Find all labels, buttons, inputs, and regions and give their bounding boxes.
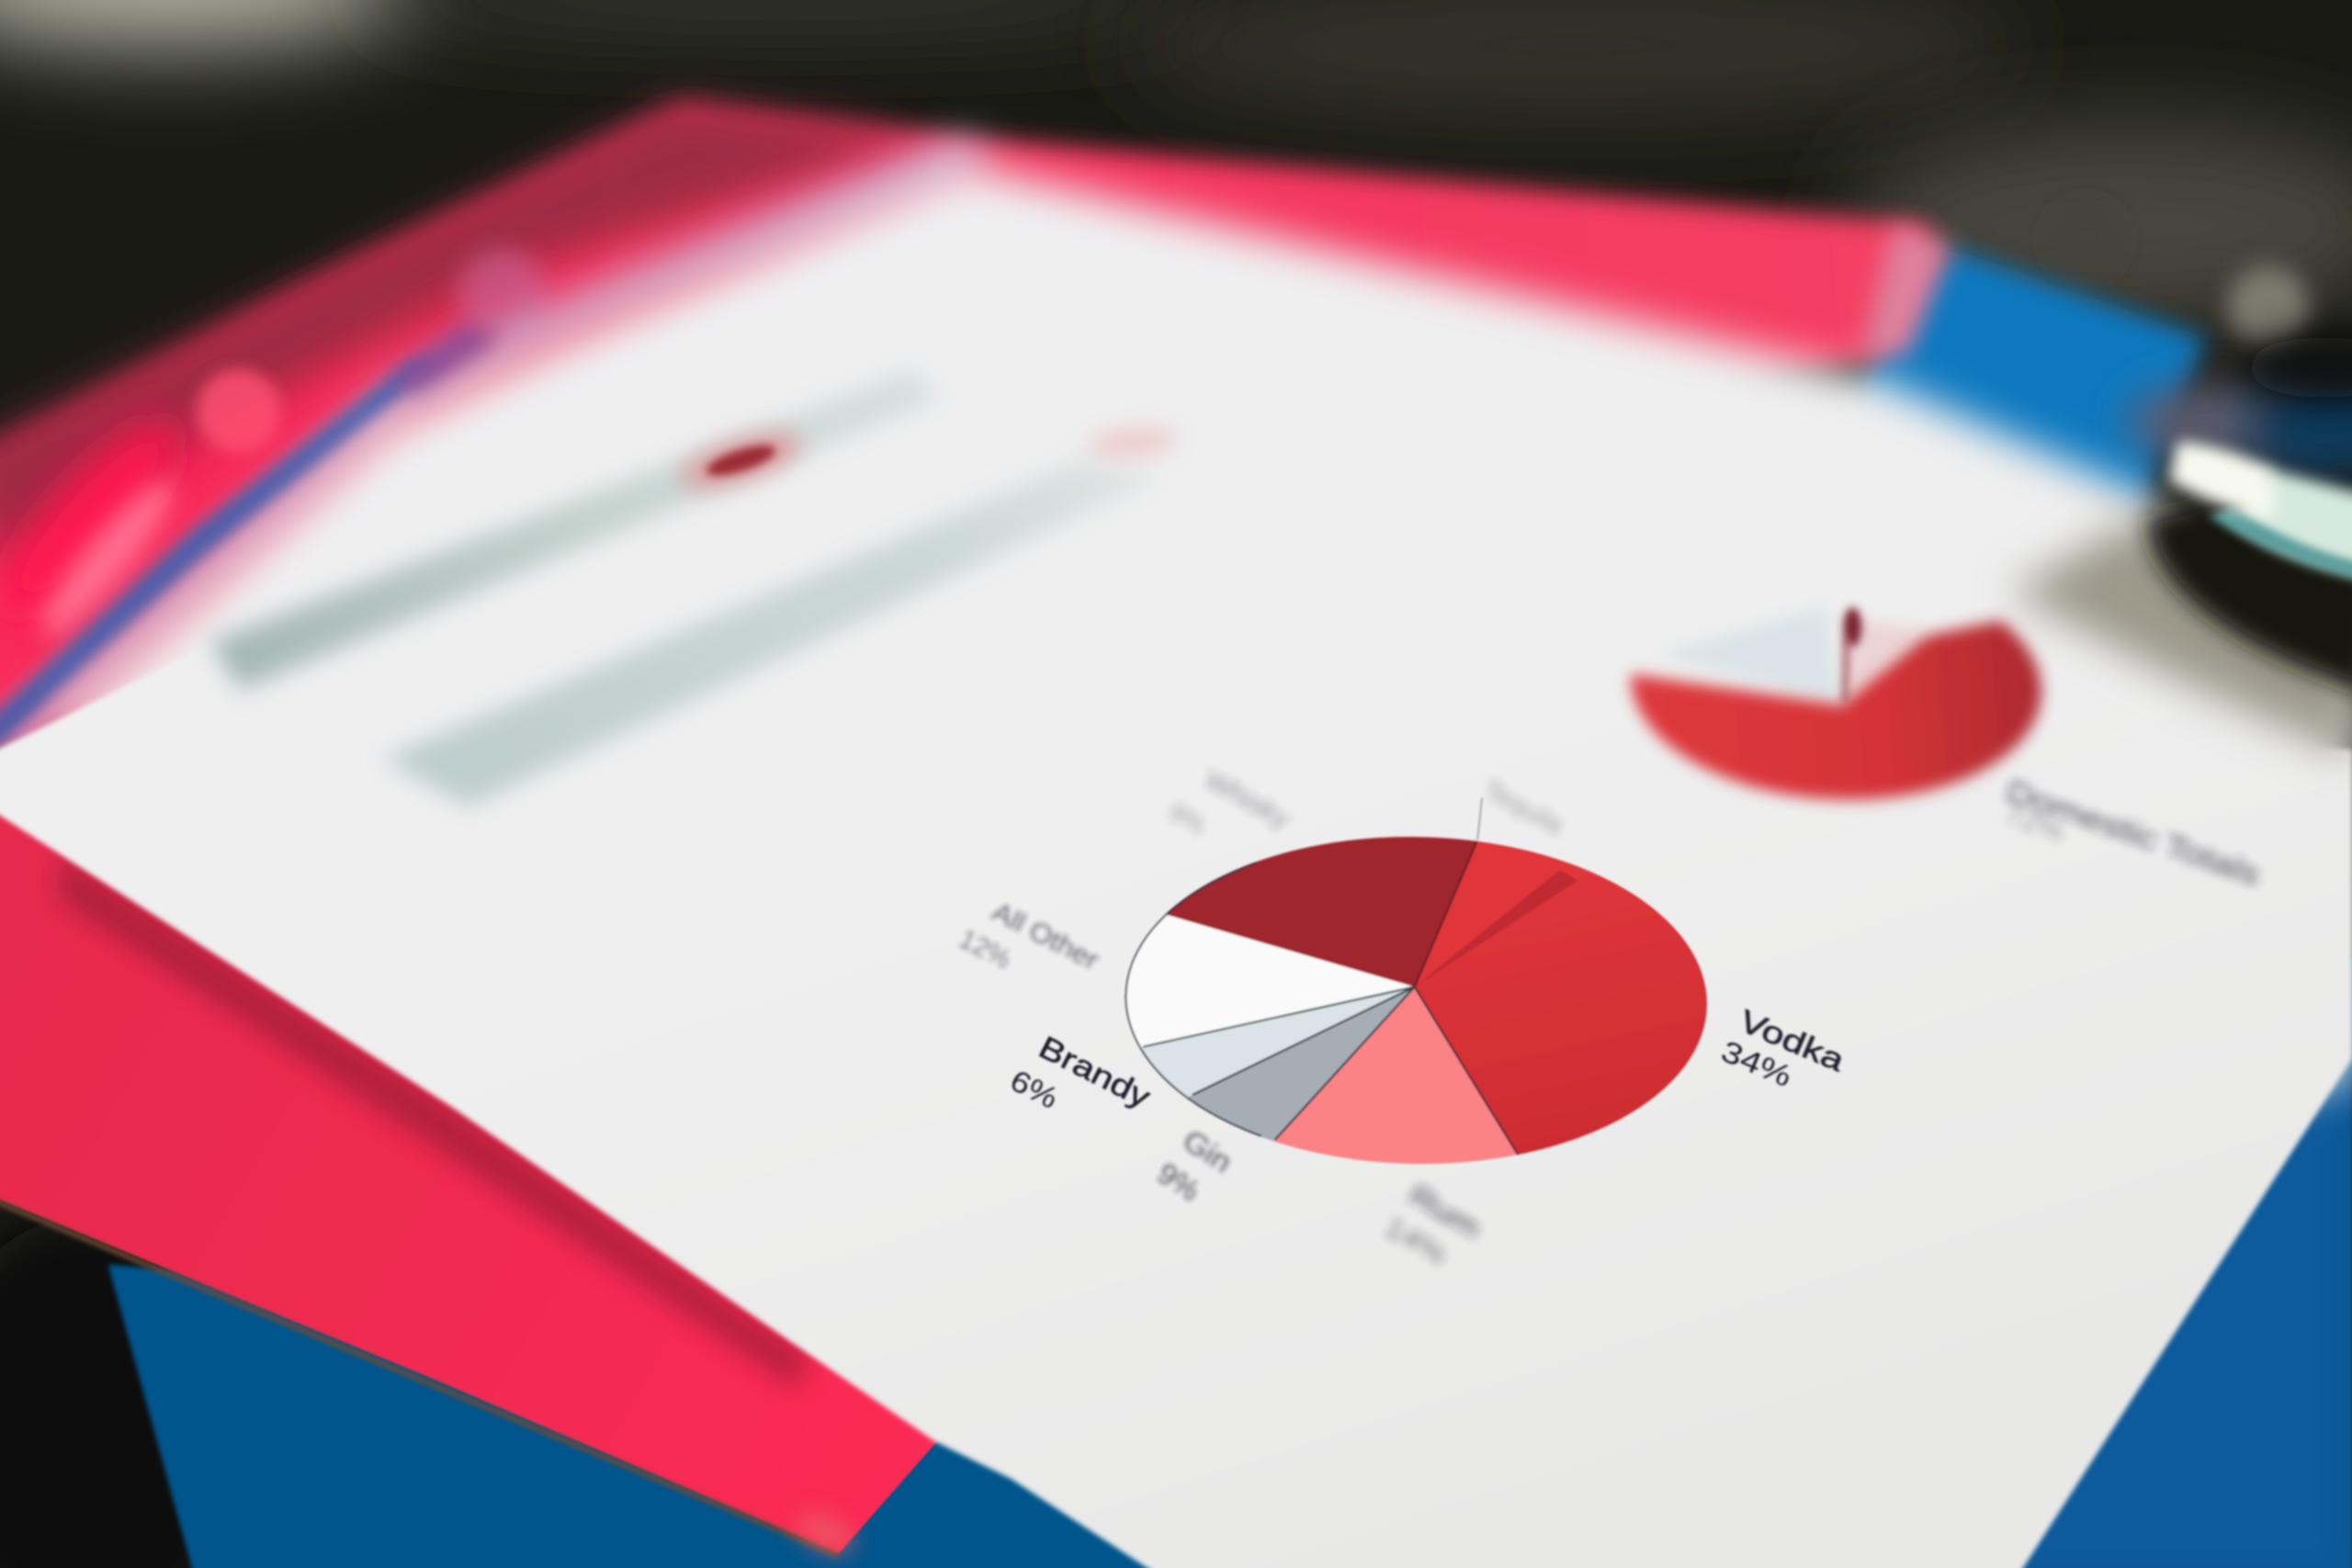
bokeh: muted purple disc: [458, 249, 548, 339]
red folder: lower: [0, 705, 1050, 1559]
magnifier lens: [2127, 337, 2352, 693]
red folder: shadow under paper: [60, 855, 810, 1387]
lens: dark blue top: [2250, 377, 2352, 479]
pie slice: pale grey: [1657, 606, 1839, 705]
blue folder: lower: [108, 960, 2352, 1568]
blue folder: lower right tone: [1350, 960, 2352, 1568]
label: Whisky: Whisky: [1200, 765, 1295, 834]
lens: white highlight: [2169, 441, 2274, 517]
label: 34%: 34%: [1716, 1033, 1797, 1093]
blue folder: upper right corner: [1845, 249, 2205, 517]
red folder: pale corner: [791, 1506, 858, 1559]
pie slice: dark red: [1165, 835, 1477, 988]
label: 6%: 6%: [1005, 1065, 1063, 1115]
label: Vodka: Vodka: [1735, 1004, 1849, 1078]
lens: grey purple rim: [2127, 384, 2313, 462]
pie chart: small blurred: [1619, 601, 2054, 812]
pie slice: vodka: [1415, 869, 1709, 1156]
pie chart: drinks market share: [1124, 797, 1709, 1165]
label: 72%: 72%: [2002, 799, 2068, 847]
label: 14%: 14%: [1380, 1212, 1453, 1271]
bar segment: dark red core: [704, 439, 778, 481]
pink folder corner highlight: [1860, 225, 1953, 357]
highlight: pink streak: [28, 468, 189, 649]
label: 9%: 9%: [1151, 1156, 1206, 1208]
pie slice: pink rum: [996, 987, 1725, 1491]
pie slice: large red: [1619, 610, 2054, 812]
red folder: upper: [0, 102, 1932, 930]
red folder: highlights on left: [0, 249, 548, 649]
label: All Other: All Other: [988, 896, 1104, 976]
lens: pale glass: [2232, 468, 2352, 578]
pie leader line: [1477, 798, 1482, 840]
lens: black top shade: [2243, 337, 2352, 398]
lens shadow on paper: [2010, 517, 2352, 758]
label: 12%: 12%: [954, 923, 1016, 976]
bokeh highlights: [2052, 207, 2309, 346]
highlight: bright magenta: [0, 397, 204, 638]
bar segment: pink halo: [675, 423, 807, 499]
pie outline: left and lower left: [1123, 833, 1709, 1168]
bar: upper: [210, 369, 939, 690]
label: Tequila: Tequila: [1479, 775, 1567, 840]
pie slice: red: [1415, 840, 1588, 987]
paper sheet: soft far side: [60, 165, 2352, 1349]
pie slice: pale pink: [1845, 618, 1926, 705]
pie marker: leader: [1845, 637, 1847, 702]
pie slice: pale brandy: [600, 987, 1415, 1311]
label: Rum: Rum: [1404, 1178, 1487, 1245]
paper sheet: near side: [0, 600, 2352, 1568]
paper edge: blue lavender reflection: [0, 138, 990, 787]
label: 9% top: 9%: [1164, 797, 1210, 840]
pie divider: red strip: [1415, 870, 1578, 987]
bar chart: blurred bars: [210, 369, 1179, 807]
red folder: shaded far edge: [0, 99, 930, 570]
pie slice: grey gin: [749, 987, 1415, 1446]
bar segment: pale pink: [1087, 426, 1179, 458]
lens: black body: [2146, 495, 2352, 693]
pie slice: white other: [1125, 913, 1413, 1048]
label: Brandy: Brandy: [1033, 1030, 1156, 1115]
lens: teal rim: [2208, 507, 2352, 585]
pie dividers: [1143, 840, 1518, 1155]
pie marker: dark sliver: [1844, 607, 1861, 647]
bar: lower: [382, 459, 1162, 807]
label: Domestic Totals: Domestic Totals: [2002, 773, 2265, 893]
red folder: brown card edge: [0, 1200, 839, 1555]
label: Gin: Gin: [1177, 1123, 1238, 1179]
bokeh: pink disc: [197, 369, 280, 453]
